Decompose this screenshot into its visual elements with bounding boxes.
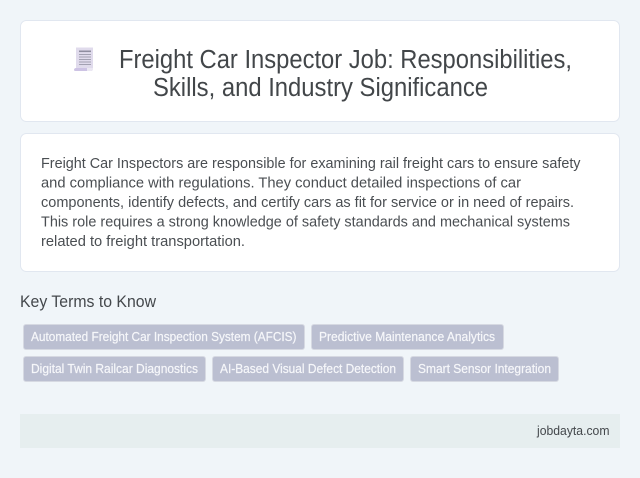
title	[119, 46, 572, 102]
tag: predictive maintenance: Predictive Maintenance Analytics	[319, 330, 495, 344]
title: Skills, and Industry Significance	[153, 74, 488, 102]
panel: title card	[20, 20, 620, 122]
tag: digital twin: Digital Twin Railcar Diagnostics	[31, 362, 198, 376]
footer bar: jobdayta.com	[536, 424, 610, 438]
footer bar	[20, 414, 620, 448]
tag: digital twin	[24, 356, 206, 382]
tag: smart sensor	[410, 356, 558, 382]
tag: predictive maintenance	[312, 324, 504, 350]
tag: AFCIS	[24, 324, 304, 350]
tag: smart sensor: Smart Sensor Integration	[418, 362, 551, 376]
description text: This role requires a strong knowledge of safety standards and mechanical systems	[41, 214, 570, 230]
description text	[41, 156, 581, 250]
tag list	[24, 324, 558, 382]
panel: description card	[20, 134, 620, 272]
description text: and compliance with regulations. They conduct detailed inspections of car	[41, 176, 521, 192]
title: Freight Car Inspector Job: Responsibilities,	[119, 46, 572, 74]
description text: related to freight transportation.	[41, 234, 245, 250]
heading: key terms: Key Terms to Know	[20, 293, 156, 311]
tag: AFCIS: Automated Freight Car Inspection System (AFCIS)	[31, 330, 296, 344]
description text: Freight Car Inspectors are responsible for examining rail freight cars to ensure safety	[41, 156, 581, 172]
icon: document scroll	[74, 48, 93, 71]
tag: AI visual defect detection: AI-Based Visual Defect Detection	[220, 362, 396, 376]
description text: components, identify defects, and certify cars as fit for service or in need of repairs.	[41, 195, 574, 211]
tag: AI visual defect detection	[212, 356, 404, 382]
